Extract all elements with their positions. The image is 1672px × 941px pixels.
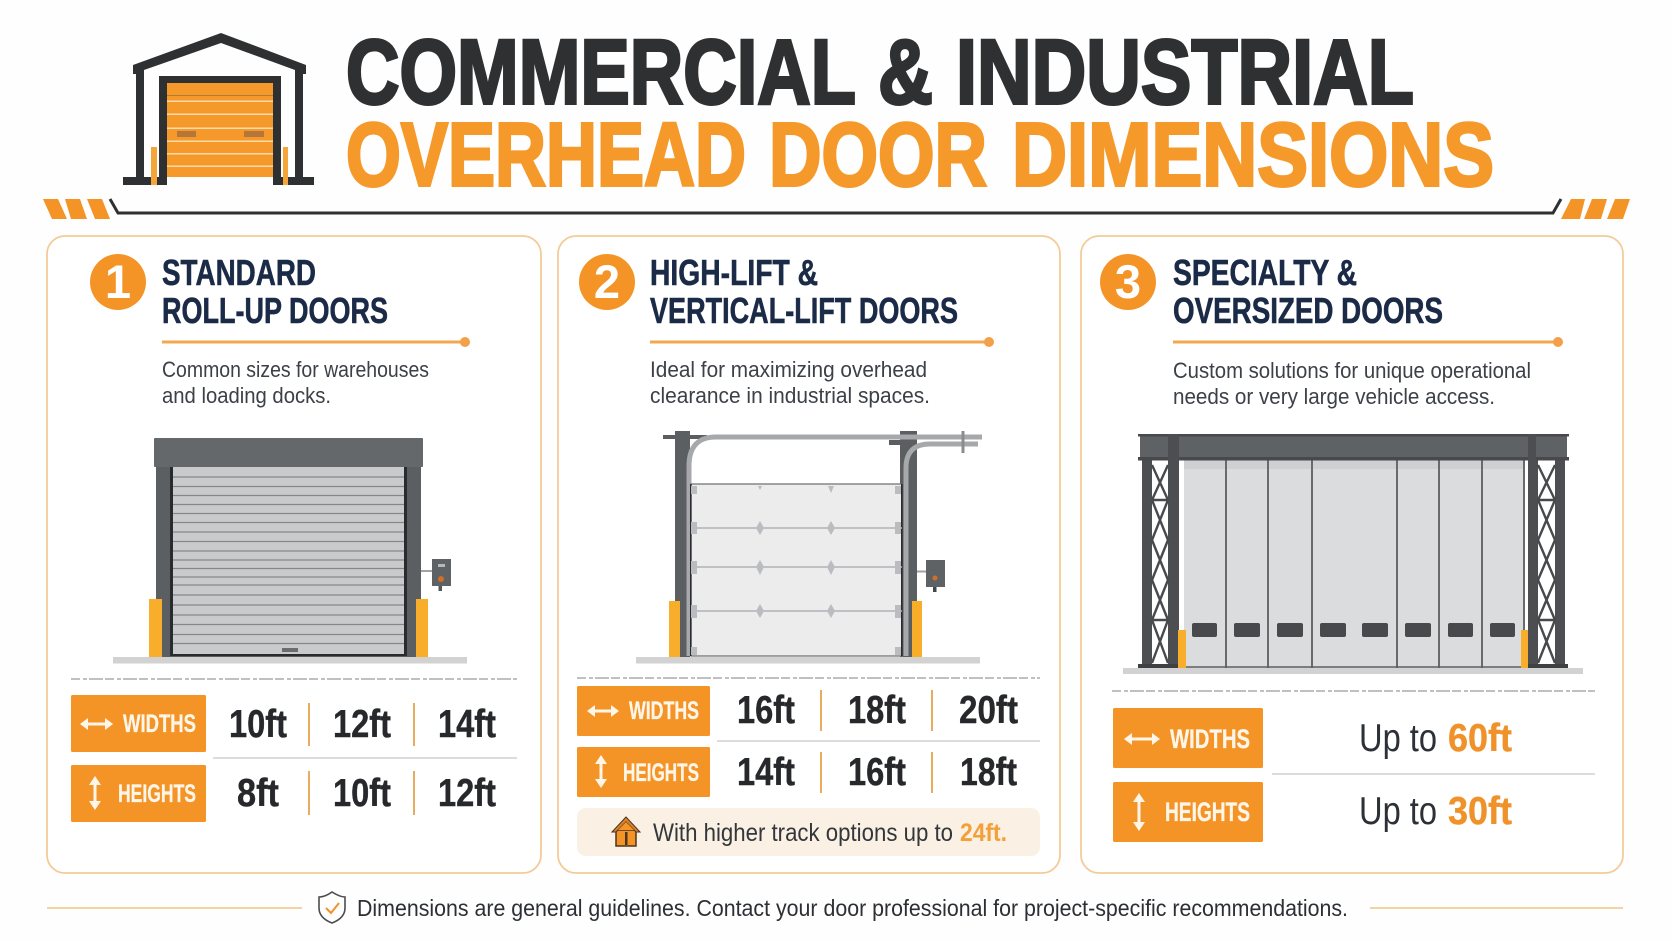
description: Common sizes for warehouses (162, 357, 429, 382)
width values: 16ft (737, 689, 795, 732)
heights badge: HEIGHTS (623, 759, 699, 787)
width values: 18ft (848, 689, 906, 732)
heading: specialty and oversized doors (1173, 252, 1443, 331)
number badge 1: 1 (105, 255, 131, 308)
number badge 3 (1100, 254, 1156, 310)
height value: 30ft (1448, 790, 1512, 833)
widths badge: WIDTHS (629, 697, 699, 725)
panel: specialty and oversized doors (1081, 236, 1623, 873)
description: needs or very large vehicle access. (1173, 384, 1495, 409)
heading: specialty and oversized doors: SPECIALTY & (1173, 252, 1357, 293)
heading rule (650, 337, 994, 347)
description: Ideal for maximizing overhead (650, 357, 927, 382)
description (650, 357, 930, 408)
height values: 10ft (333, 772, 391, 815)
description: Custom solutions for unique operational (1173, 358, 1531, 383)
height values: 14ft (737, 751, 795, 794)
icon: house (612, 817, 640, 846)
header rule with stripes (43, 199, 1630, 219)
heading: high-lift and vertical-lift doors: HIGH-LIFT & (650, 252, 818, 293)
callout: higher track options: 24ft. (960, 819, 1007, 847)
heights badge: HEIGHTS (118, 780, 196, 808)
title: OVERHEAD (346, 106, 746, 206)
height values (237, 771, 496, 815)
heading rule (162, 337, 470, 347)
widths badge (577, 686, 710, 736)
description: and loading docks. (162, 383, 331, 408)
width values: 20ft (959, 689, 1018, 732)
width values: 14ft (438, 703, 496, 746)
heights badge (577, 747, 710, 797)
widths badge (1113, 708, 1263, 768)
icon: shield check (319, 892, 345, 923)
title: DIMENSIONS (1012, 106, 1494, 206)
height values: 16ft (848, 751, 906, 794)
number badge 2: 2 (594, 255, 620, 308)
width value: 60ft (1448, 717, 1512, 760)
height value (1359, 790, 1512, 833)
heading: standard roll-up doors (162, 252, 388, 331)
heights badge: HEIGHTS (1165, 797, 1250, 827)
heights badge (71, 765, 206, 822)
number badge 2 (579, 254, 635, 310)
illustration: high-lift door (636, 431, 982, 664)
width value: Up to (1359, 717, 1437, 760)
height values: 8ft (237, 772, 279, 815)
heading: specialty and oversized doors: OVERSIZED DOORS (1173, 290, 1443, 331)
heading rule (1173, 337, 1563, 347)
title: COMMERCIAL (346, 22, 856, 124)
height value: Up to (1359, 790, 1437, 833)
illustration: oversized sectional door (1123, 434, 1583, 674)
width values (229, 703, 496, 746)
footer note: Dimensions are general guidelines. Contact your door professional for project-specific recommendations. (357, 895, 1348, 921)
width values (737, 689, 1018, 732)
heading: high-lift and vertical-lift doors (650, 252, 958, 331)
title: & (878, 22, 933, 124)
height values: 12ft (438, 772, 496, 815)
number badge 3: 3 (1115, 255, 1141, 308)
heading: high-lift and vertical-lift doors: VERTICAL-LIFT DOORS (650, 290, 958, 331)
illustration: roll-up door (113, 438, 467, 664)
height values: 18ft (960, 751, 1017, 794)
heights badge (1113, 782, 1263, 842)
callout: higher track options: With higher track options up to (653, 819, 953, 847)
number badge 1 (90, 254, 146, 310)
widths badge (71, 695, 206, 752)
title (346, 22, 1494, 206)
width value (1359, 717, 1512, 760)
heading: standard roll-up doors: STANDARD (162, 252, 316, 293)
description (162, 357, 429, 408)
footer note (47, 892, 1623, 923)
title: INDUSTRIAL (956, 22, 1414, 124)
width values: 10ft (229, 703, 287, 746)
widths badge: WIDTHS (123, 710, 196, 738)
description: clearance in industrial spaces. (650, 383, 930, 408)
widths badge: WIDTHS (1170, 724, 1250, 754)
height values (737, 751, 1017, 794)
description (1173, 358, 1531, 409)
panel: standard roll-up doors (47, 236, 541, 873)
panel: high-lift and vertical-lift doors (558, 236, 1060, 873)
callout: higher track options (577, 808, 1040, 856)
width values: 12ft (333, 703, 391, 746)
title: DOOR (769, 106, 987, 206)
heading: standard roll-up doors: ROLL-UP DOORS (162, 290, 388, 331)
icon: warehouse with orange door (123, 33, 314, 185)
